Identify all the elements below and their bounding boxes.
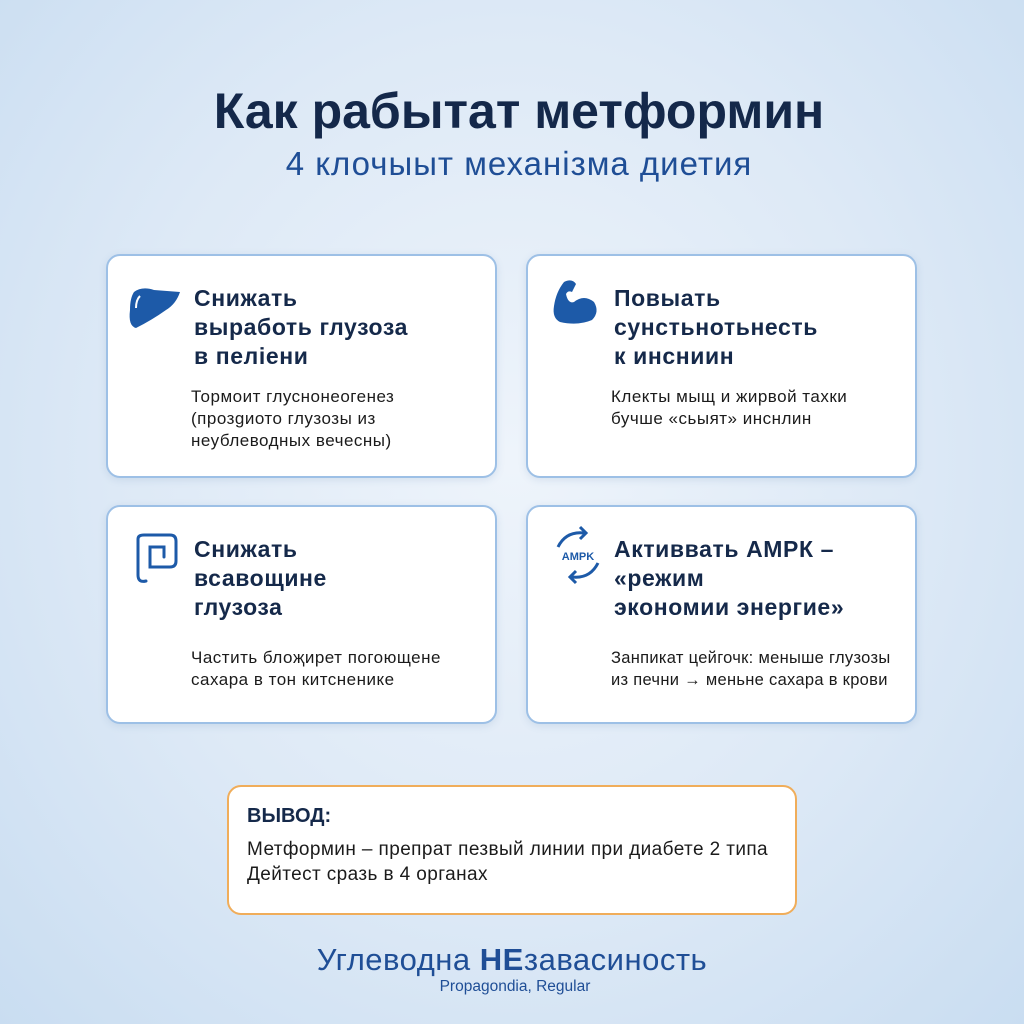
heading: Повыать xyxy=(614,285,721,311)
heading: сунстьнотьнесть xyxy=(614,314,818,340)
heading: выработь глузоза xyxy=(194,314,408,340)
heading: в пеліени xyxy=(194,343,308,369)
callout heading: ВЫВОД: xyxy=(247,805,331,827)
heading xyxy=(614,536,844,620)
text xyxy=(191,648,441,689)
icon: intestine xyxy=(136,534,178,583)
title: Как рабытат метформин xyxy=(214,83,824,139)
callout: conclusion xyxy=(227,785,797,915)
icon: AMPK cycle xyxy=(556,526,600,584)
heading: к инсниин xyxy=(614,343,734,369)
panel: AMPK xyxy=(526,505,917,724)
heading: всавощине xyxy=(194,565,327,591)
heading xyxy=(194,285,408,369)
panel: muscle xyxy=(526,254,917,478)
panel: liver xyxy=(106,254,497,478)
icon: muscle xyxy=(554,280,596,324)
footer subtitle: Propagondia, Regular xyxy=(440,978,590,995)
heading: экономии энергие» xyxy=(614,594,844,620)
subtitle: 4 клочыыт механізма диетия xyxy=(286,145,752,182)
text: Клекты мыщ и жирвой тахки xyxy=(611,387,847,406)
heading: Активвать АМРК – xyxy=(614,536,834,562)
text: бучше «сьыят» инснлин xyxy=(611,409,812,428)
heading: «режим xyxy=(614,565,704,591)
icon: liver xyxy=(130,288,180,328)
text: Частить блоҗирет погоющене xyxy=(191,648,441,667)
heading xyxy=(614,285,818,369)
callout text xyxy=(247,839,768,885)
text: (прозgиото глузозы из xyxy=(191,409,376,428)
text: Тормоит глуснонеогенез xyxy=(191,387,394,406)
panel: intestine xyxy=(106,505,497,724)
text xyxy=(611,387,847,428)
text: из печни → меньне сахара в крови xyxy=(611,671,888,689)
heading xyxy=(194,536,327,620)
text: Занпикат цейгочк: меныше глузозы xyxy=(611,649,890,667)
text xyxy=(611,649,890,689)
text: неублеводных вечесны) xyxy=(191,431,392,450)
text xyxy=(191,387,394,450)
heading: Снижать xyxy=(194,536,298,562)
heading: глузоза xyxy=(194,594,283,620)
icon: AMPK cycle: AMPK xyxy=(562,551,594,563)
callout text: Метформин – препрат пезвый линии при диабете 2 типа xyxy=(247,839,768,860)
text: сахара в тон китсненике xyxy=(191,670,395,689)
callout text: Дейтест сразь в 4 органах xyxy=(247,864,488,885)
heading: Снижать xyxy=(194,285,298,311)
footer brand: Углеводна НЕзавасиность xyxy=(317,942,707,977)
